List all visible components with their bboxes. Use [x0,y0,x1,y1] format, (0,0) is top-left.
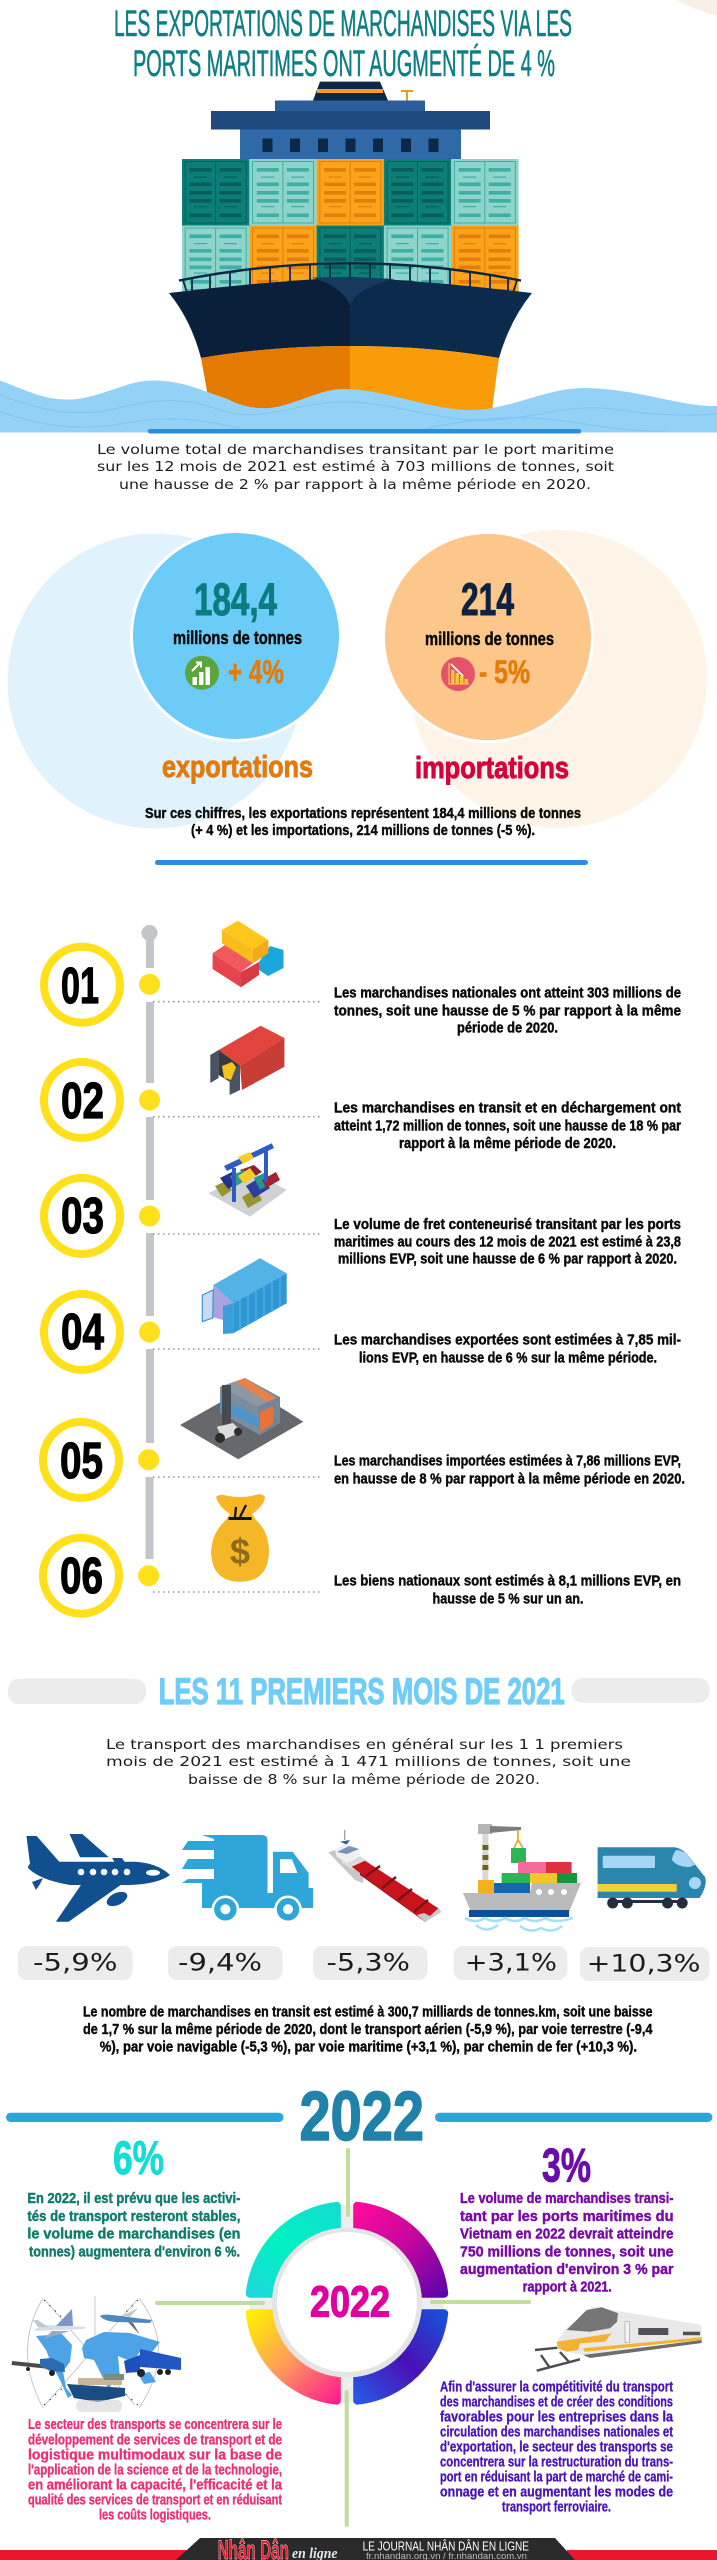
icon: cargo ship with crane [463,1824,581,1931]
panel: imports [382,530,707,828]
decorative corner [677,0,717,16]
text: transit summary: %), par voie navigable (-5,3 %), par voie maritime (+3,1 %), par chemin de fer (+10,3 %). [100,2039,637,2056]
icon: money bag: $ [230,1531,250,1572]
step 01: 01 [61,957,99,1014]
step 02: 02 [61,1072,104,1129]
intro text: une hausse de 2 % par rapport à la même période en 2020. [119,477,591,493]
text: 11 months intro: Le transport des marchandises en général sur les 1 1 premiers [106,1737,623,1753]
callout: 6%: En 2022, il est prévu que les activi- [27,2190,240,2207]
text: step 01 [334,985,681,1037]
illustration: global logistics [12,2296,181,2412]
illustration: sea waves [0,380,717,432]
text: logistics [28,2417,283,2523]
connector lines [157,2150,529,2525]
icon: open blue container [202,1258,287,1334]
text: logistics: les coûts logistiques. [99,2507,211,2523]
text: rail competitiveness: favorables pour les entreprises dans la [440,2410,674,2426]
text: step 02 [334,1100,681,1152]
icon: gantry crane [208,1143,287,1217]
icon: money bag [211,1494,269,1582]
callout: 3%: 750 millions de tonnes, soit une [460,2244,674,2261]
stat pills: +3,1% [465,1949,557,1977]
callout: 3%: 3% [542,2139,591,2192]
summary text: (+ 4 %) et les importations, 214 millions de tonnes (-5 %). [191,822,535,839]
panel: exports [8,530,342,828]
panel: exports: 184,4 [194,574,277,625]
step 06 [43,1494,681,1614]
stat pills: +10,3% [587,1950,700,1978]
summary text: Sur ces chiffres, les exportations représentent 184,4 millions de tonnes [145,805,581,822]
text: rail competitiveness: onnage et en augmentant les modes de [440,2485,673,2501]
stat pills: -5,3% [326,1949,410,1977]
intro text [97,443,614,493]
text: rail competitiveness: transport ferroviaire. [502,2500,611,2516]
callout: 3%: augmentation d'environ 3 % par [460,2261,674,2278]
intro text: sur les 12 mois de 2021 est estimé à 703 millions de tonnes, soit [97,459,614,475]
panel: imports: 214 [461,574,514,625]
text: step 03 [334,1216,681,1268]
callout: 3%: tant par les ports maritimes du [460,2208,674,2225]
icon: container yard [180,1378,303,1459]
text: step 04 [334,1332,681,1366]
step 06: 06 [60,1547,103,1604]
illustration: container ship [169,82,532,420]
icon: rising chart [185,656,219,690]
footer: LE JOURNAL NHÂN DÂN EN LIGNE [363,2539,529,2554]
text: transit summary [83,2004,653,2056]
intro text: Le volume total de marchandises transitant par le port maritime [97,443,614,458]
callout: 3%: rapport à 2021. [523,2279,612,2296]
callout: 6%: tés de transport resteront stables, [27,2208,240,2225]
text: logistics: Le secteur des transports se concentrera sur le [28,2417,282,2433]
step 05 [43,1378,685,1498]
icon: stacked containers [213,921,284,987]
donut: 2022: 2022 [310,2278,390,2327]
text: step 02: rapport à la même période de 2020. [399,1135,616,1152]
text: 11 months intro: mois de 2021 est estimé à 1 471 millions de tonnes, soit une [106,1754,631,1770]
label: exportations: exportations [162,749,313,784]
text: step 06: hausse de 5 % sur un an. [432,1590,584,1607]
callout: 3%: Le volume de marchandises transi- [460,2190,674,2207]
step 03 [44,1143,681,1268]
callout: 3%: Vietnam en 2022 devrait atteindre [460,2226,674,2243]
text: 11 months intro: baisse de 8 % sur la même période de 2020. [188,1772,540,1788]
text: step 04: Les marchandises exportées sont estimées à 7,85 mil- [334,1332,681,1349]
text: step 01: tonnes, soit une hausse de 5 % par rapport à la même [334,1003,681,1020]
panel: exports: + 4% [228,654,284,690]
footer [0,2535,717,2560]
label: importations: importations [415,750,569,785]
text: 11 months intro [106,1737,631,1788]
step 03: 03 [61,1187,104,1244]
icon: falling chart [441,657,475,691]
heading: 2022: 2022 [300,2077,424,2155]
panel: exports: millions de tonnes [173,628,302,648]
icon: train [598,1847,706,1908]
text: logistics: l'application de la science et de la technologie, [28,2462,282,2478]
stat pills: -5,9% [33,1949,118,1977]
text: step 05 [334,1453,685,1487]
text: logistics: en améliorant la capacité, l'efficacité et la [28,2477,283,2493]
timeline spine [138,925,320,1592]
text: step 02: Les marchandises en transit et en déchargement ont [334,1100,681,1117]
callout: 6%: 6% [113,2131,164,2184]
step 04: 04 [61,1303,104,1360]
callout: 3% [460,2139,674,2296]
icon: barge [328,1830,441,1922]
callout: 6%: le volume de marchandises (en [27,2226,240,2243]
text: step 03: Le volume de fret conteneurisé transitant par les ports [334,1216,681,1233]
icon: truck [182,1835,313,1922]
donut: 2022 [250,2205,444,2403]
text: step 01: période de 2020. [457,1020,558,1037]
callout: 6% [27,2131,240,2261]
text: step 06 [334,1573,681,1607]
divider [148,429,581,434]
icon: open red container [210,1026,284,1095]
step 02 [44,1026,681,1152]
step 01 [44,921,681,1037]
step 05: 05 [60,1432,103,1489]
panel: imports: - 5% [479,654,530,690]
callout: 6%: tonnes) augmentera d'environ 6 %. [29,2244,240,2261]
summary text [145,805,581,839]
divider [155,860,588,865]
step 04 [44,1258,681,1370]
text: logistics: développement de services de transport et de [28,2432,282,2448]
text: step 04: lions EVP, en hausse de 6 % sur la même période. [359,1349,657,1366]
icon: airplane [26,1834,170,1922]
text: rail competitiveness [440,2380,674,2516]
panel: imports: millions de tonnes [425,629,554,649]
title [114,3,572,84]
stat pills: -9,4% [178,1949,262,1977]
text: logistics: logistique multimodaux sur la base de [28,2447,282,2463]
text: logistics: qualité des services de transport et en réduisant [28,2492,282,2508]
illustration: high-speed train [535,2307,702,2371]
heading: 2022 [6,2077,712,2155]
stat pills [18,1946,710,1981]
